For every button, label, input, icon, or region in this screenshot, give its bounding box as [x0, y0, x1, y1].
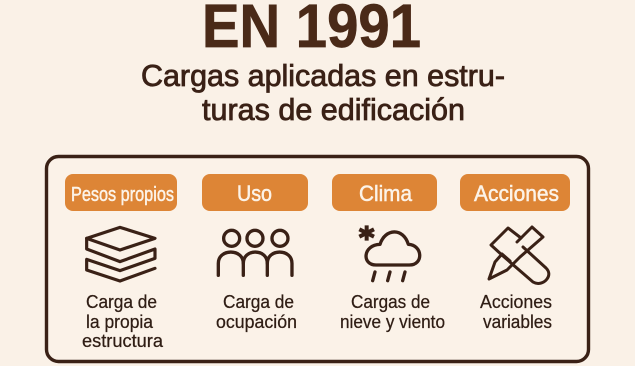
subtitle: Cargas aplicadas en estru- [141, 59, 505, 93]
label: Carga de ocupación: Carga de [223, 292, 294, 312]
pill: Clima: Clima [359, 181, 413, 206]
label: Cargas de nieve y viento: nieve y viento [340, 312, 445, 332]
label: Carga de ocupación [216, 292, 297, 332]
pill: Pesos propios [65, 174, 177, 211]
label: Acciones variables [480, 292, 552, 332]
subtitle [141, 59, 505, 127]
pill: Uso [202, 174, 308, 211]
label: Acciones variables: Acciones [480, 292, 552, 312]
label: Carga de la propia estructura: Carga de [86, 292, 157, 312]
label: Carga de la propia estructura: estructura [82, 331, 164, 351]
icon: crossed tools [489, 227, 549, 283]
label: Carga de ocupación: ocupación [216, 312, 297, 332]
label: Carga de la propia estructura: la propia [86, 312, 154, 332]
label: Carga de la propia estructura [82, 292, 164, 351]
pill: Acciones: Acciones [474, 181, 559, 206]
pill: Uso: Uso [237, 181, 272, 206]
label: Cargas de nieve y viento [340, 292, 445, 332]
pill: Pesos propios: Pesos propios [71, 183, 174, 206]
icon: people [218, 230, 292, 275]
icon: snow and rain cloud [359, 225, 420, 281]
subtitle: turas de edificación [202, 93, 465, 127]
panel: load categories [46, 156, 588, 362]
label: Cargas de nieve y viento: Cargas de [351, 292, 430, 312]
label: Acciones variables: variables [483, 312, 552, 332]
pill: Clima [332, 174, 437, 211]
pill: Acciones [460, 174, 570, 211]
icon: stacked layers [87, 227, 155, 281]
